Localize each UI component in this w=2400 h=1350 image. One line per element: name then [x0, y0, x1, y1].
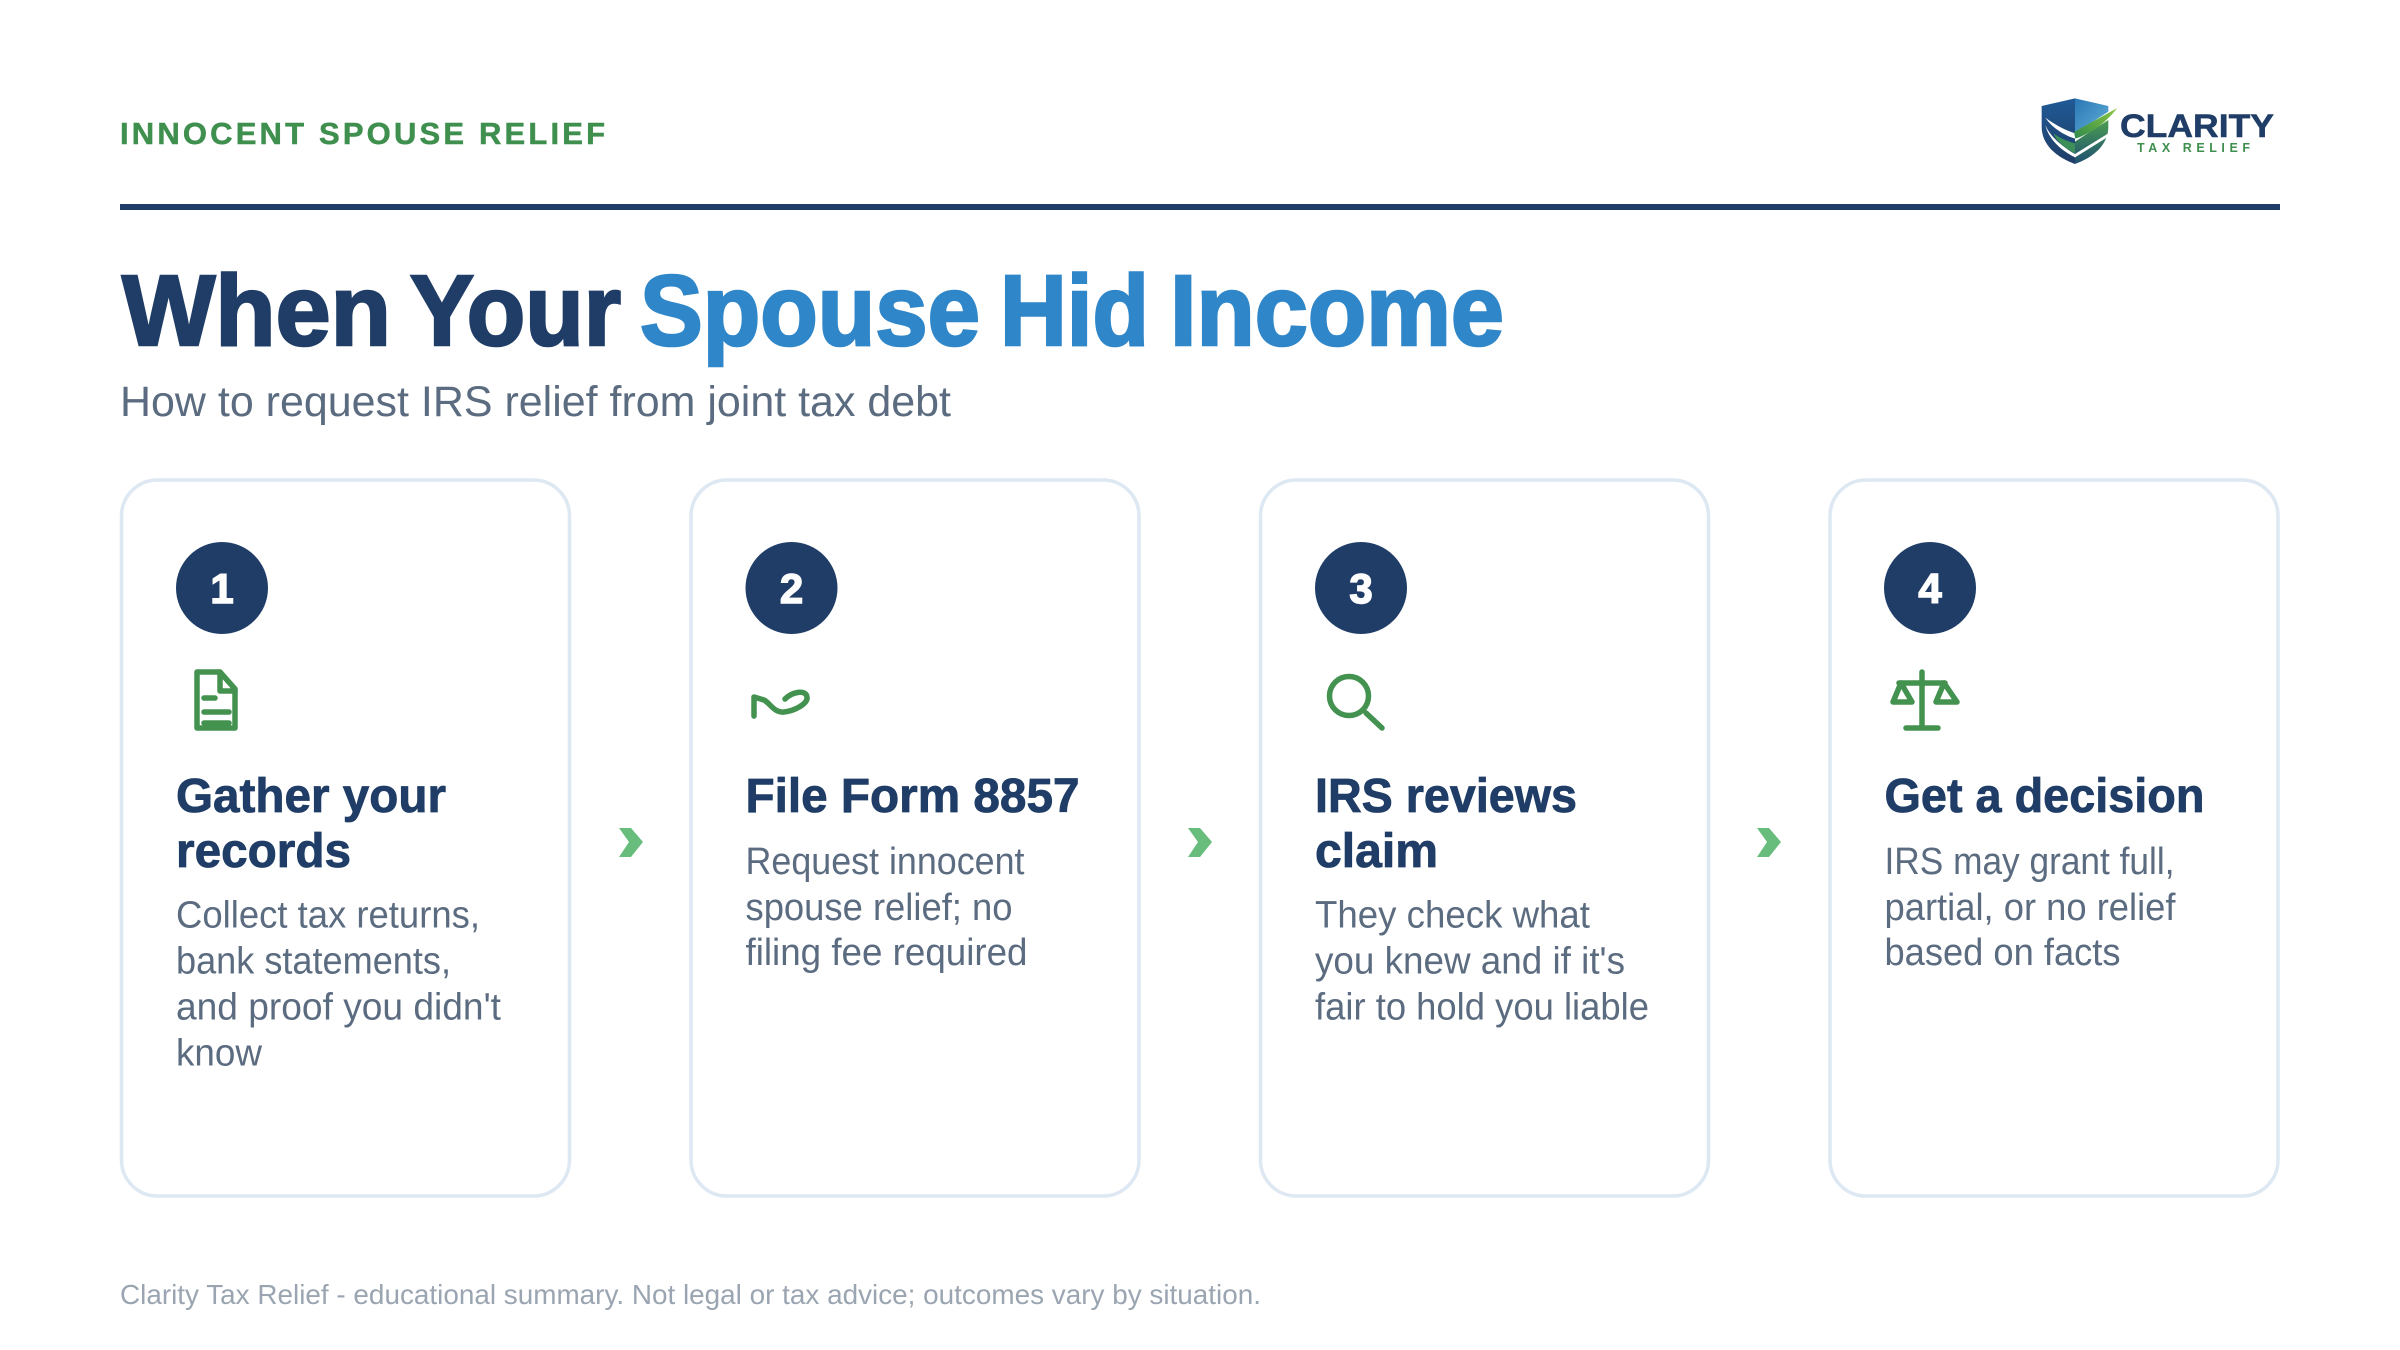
body text: Collect tax returns, [176, 894, 480, 936]
step number 2 [746, 542, 838, 634]
title: Income [1170, 255, 1504, 367]
heading: get a decision: Get a decision [1884, 770, 2204, 823]
panel: step 2 [691, 480, 1139, 1196]
heading: gather your records: records [176, 825, 351, 878]
body text: you knew and if it's [1315, 940, 1625, 982]
icon: document [197, 672, 235, 728]
heading: irs reviews claim: claim [1315, 825, 1438, 878]
step number 2: 2 [780, 565, 803, 612]
title: Your [410, 255, 621, 367]
subtitle: How to request IRS relief from joint tax debt [120, 378, 951, 426]
body text: fair to hold you liable [1315, 986, 1649, 1028]
body text [746, 841, 1028, 974]
body text [1315, 894, 1649, 1028]
step number 1 [176, 542, 268, 634]
body text: They check what [1315, 894, 1590, 936]
icon: shield with check [2042, 98, 2117, 164]
step number 1: 1 [210, 565, 234, 612]
body text: based on facts [1884, 932, 2120, 974]
arrow 3 [1757, 828, 1781, 857]
heading: gather your records [176, 770, 446, 878]
body text [176, 894, 501, 1074]
step number 4 [1884, 542, 1976, 634]
heading: gather your records: Gather your [176, 770, 446, 823]
title [122, 255, 1504, 367]
logo tagline: TAX RELIEF [2137, 141, 2250, 155]
step number 3 [1315, 542, 1407, 634]
body text: bank statements, [176, 940, 451, 982]
heading: file form 8857: File Form 8857 [746, 770, 1080, 823]
footer disclaimer: Clarity Tax Relief - educational summary. Not legal or tax advice; outcomes vary by situation. [120, 1279, 1261, 1310]
body text: spouse relief; no [746, 887, 1012, 929]
panel: step 1 [122, 480, 570, 1196]
logo wordmark: CLARITY [2120, 108, 2274, 144]
panel: step 3 [1260, 480, 1708, 1196]
icon: scales [1893, 672, 1957, 728]
step number 3: 3 [1349, 565, 1373, 612]
title: When [122, 255, 391, 367]
body text: filing fee required [746, 932, 1028, 974]
arrow 2 [1188, 828, 1212, 857]
eyebrow label: INNOCENT SPOUSE RELIEF [120, 116, 605, 151]
header rule [120, 204, 2280, 210]
body text: Request innocent [746, 841, 1025, 883]
title: Hid [1000, 255, 1149, 367]
title: Spouse [640, 255, 980, 367]
body text [1884, 841, 2176, 974]
arrow 1 [619, 828, 643, 857]
icon: magnifier [1330, 676, 1382, 728]
panel: step 4 [1830, 480, 2278, 1196]
heading: irs reviews claim [1315, 770, 1577, 878]
step number 4: 4 [1918, 565, 1942, 612]
heading: irs reviews claim: IRS reviews [1315, 770, 1577, 823]
body text: know [176, 1032, 263, 1074]
body text: and proof you didn't [176, 986, 501, 1028]
logo: Clarity Tax Relief [2042, 98, 2274, 164]
icon: signature [754, 692, 807, 716]
body text: IRS may grant full, [1884, 841, 2174, 883]
body text: partial, or no relief [1884, 887, 2176, 929]
